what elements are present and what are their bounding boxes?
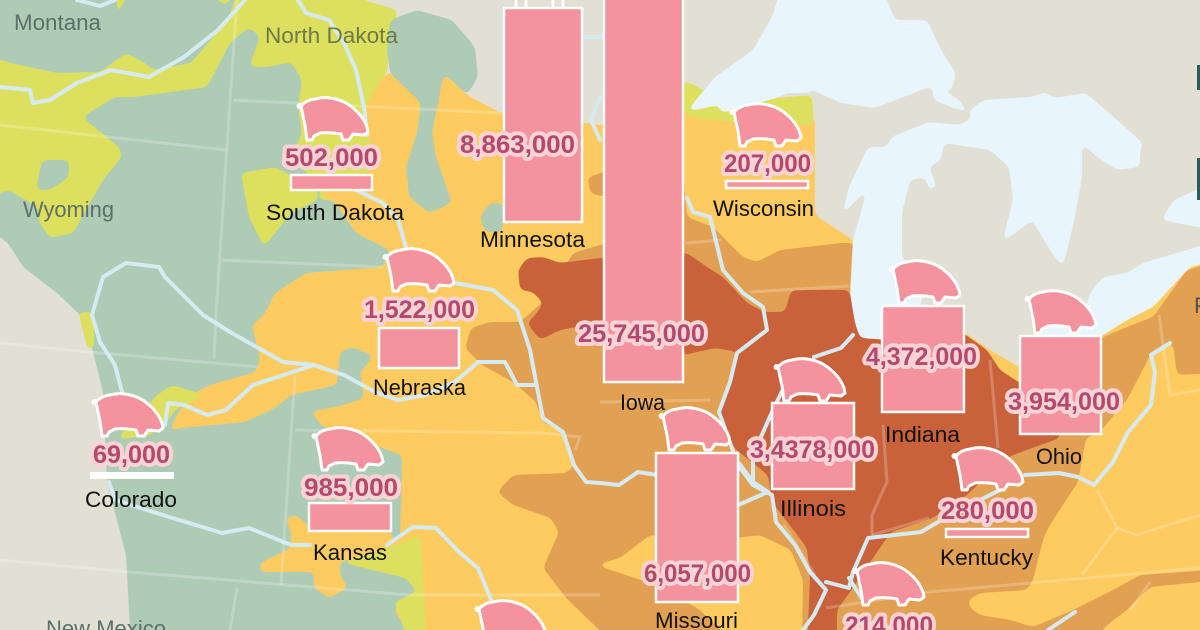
- state: Iowa: [578, 0, 705, 415]
- value: 4,372,000: [866, 343, 977, 371]
- bar: [90, 472, 174, 479]
- state: Minnesota: [460, 0, 586, 252]
- value: 985,000: [304, 474, 398, 502]
- bar: [882, 306, 964, 412]
- bar: [726, 181, 808, 188]
- value: 3,4378,000: [750, 436, 875, 464]
- pig icon: [312, 428, 383, 470]
- bar: [604, 0, 683, 382]
- value: 3,954,000: [1008, 388, 1120, 416]
- band: green western plains: [0, 0, 503, 630]
- value: 25,745,000: [578, 320, 705, 348]
- state: Oklahoma area pig: [474, 601, 546, 630]
- value: 8,863,000: [460, 131, 575, 159]
- band: yellow-orange Kansas patch: [260, 515, 395, 598]
- pig icon: [1024, 291, 1096, 333]
- bar: [772, 403, 854, 489]
- value: 6,057,000: [644, 560, 751, 588]
- value: 1,522,000: [364, 296, 475, 324]
- label: North Dakota: North Dakota: [265, 23, 399, 48]
- pig icon: [658, 408, 730, 450]
- band: yellow-orange: [150, 73, 1200, 630]
- pig icon: [952, 448, 1023, 490]
- pig icon: [382, 249, 454, 291]
- state: Illinois: [750, 359, 875, 521]
- state: Nebraska: [364, 249, 475, 400]
- name: Colorado: [85, 487, 177, 512]
- pig icon: [774, 359, 845, 401]
- lake: Superior, Michigan and Huron: [686, 0, 1143, 340]
- label: Wyoming: Wyoming: [23, 197, 114, 222]
- state: Colorado: [85, 394, 177, 512]
- state: South Dakota: [266, 98, 405, 225]
- state: Kentucky: [940, 448, 1034, 570]
- value: 280,000: [941, 497, 1034, 525]
- label: Montana: Montana: [14, 10, 102, 35]
- name: Illinois: [780, 496, 846, 521]
- lake: Erie: [1040, 225, 1200, 337]
- name: Minnesota: [480, 227, 586, 252]
- name: Ohio: [1036, 444, 1082, 469]
- state: Tennessee area: [845, 563, 933, 630]
- bar: [656, 453, 738, 602]
- bar: [379, 328, 459, 368]
- pig icon: [888, 261, 960, 303]
- state: Missouri: [644, 408, 751, 630]
- Great Lakes: [686, 0, 1200, 340]
- state: Kansas: [304, 428, 398, 565]
- value: 502,000: [285, 144, 378, 172]
- band: yellow-green patches: [78, 0, 427, 630]
- pig stub: [516, 0, 563, 8]
- band: yellow Missouri patch: [595, 535, 803, 630]
- value: 207,000: [724, 150, 811, 178]
- bar: [946, 529, 1028, 537]
- name: Indiana: [885, 422, 961, 447]
- lake: Ontario: [1161, 170, 1200, 230]
- bar: [504, 8, 582, 222]
- name: South Dakota: [266, 200, 405, 225]
- state: Indiana: [866, 261, 977, 447]
- band: dark orange core: [518, 253, 1060, 630]
- name: Iowa: [620, 390, 666, 415]
- bar: [291, 175, 372, 190]
- bar: [309, 503, 391, 531]
- pig icon: [730, 104, 801, 146]
- state: Ohio: [1008, 291, 1120, 469]
- name: Wisconsin: [713, 196, 814, 221]
- pig icon: [296, 98, 368, 140]
- pig icon: [92, 394, 163, 436]
- value: 69,000: [93, 441, 170, 469]
- name: Nebraska: [373, 375, 467, 400]
- bar: [1020, 336, 1101, 434]
- pig icon: [852, 563, 924, 605]
- name: Kansas: [313, 540, 387, 565]
- band: medium orange: [465, 170, 1200, 630]
- state: Wisconsin: [713, 104, 814, 221]
- band: yellow-green north: [0, 0, 814, 325]
- name: Kentucky: [940, 545, 1033, 570]
